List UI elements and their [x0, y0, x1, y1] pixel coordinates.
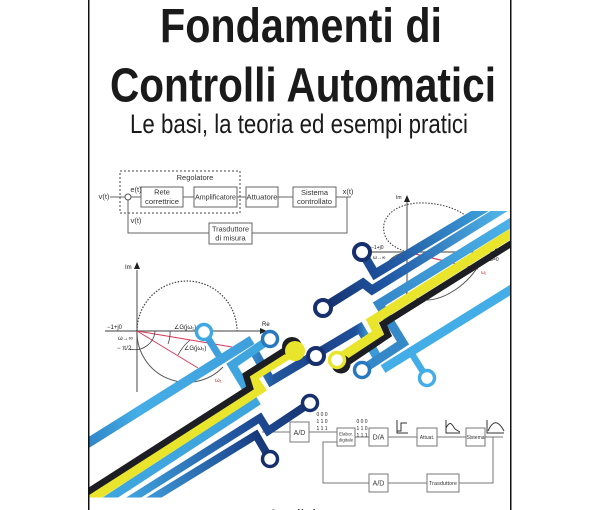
polar plot: upper right: [370, 195, 502, 300]
circuit traces: [90, 211, 510, 498]
block diagram: digital control loop: Attuat.: [420, 435, 434, 441]
block diagram: analog control loop: Trasduttore: [212, 224, 249, 234]
block diagram: analog control loop: Sistema: [301, 188, 329, 197]
trace: black: [80, 349, 287, 497]
block diagram: digital control loop: Trasduttore: [429, 481, 457, 487]
polar plot: lower left: Re: [262, 322, 270, 328]
polar plot: upper right: ω=0: [489, 257, 499, 263]
block diagram: digital control loop: A/D: [294, 430, 305, 437]
block diagram: digital control loop: 0 0 0: [316, 412, 328, 418]
polar plot: lower left: −1+j0: [107, 325, 123, 331]
block diagram: digital control loop: 0 0 0: [356, 419, 368, 425]
block diagram: digital control loop: 1 1 1: [356, 433, 368, 439]
trace: right black: [345, 238, 520, 364]
polar plot: upper right: −1+j0: [371, 245, 384, 251]
block diagram: analog control loop: v(t): [131, 216, 142, 225]
polar plot: lower left: ω₁: [215, 378, 222, 384]
title: Controlli Automatici: [110, 60, 496, 112]
block diagram: analog control loop: controllato: [297, 197, 332, 206]
block diagram: analog control loop: di misura: [215, 234, 247, 242]
block diagram: digital control loop: A/D: [373, 480, 384, 488]
block diagram: digital control loop: 1 1 1: [316, 426, 328, 432]
polar plot: upper right: ω→∞: [373, 255, 386, 261]
block diagram: digital control loop: D/A: [373, 434, 385, 442]
polar plot: upper right: Im: [396, 195, 402, 201]
block diagram: analog control loop: Regolatore: [177, 173, 213, 182]
polar plot: lower left: Im: [125, 265, 132, 271]
title: [110, 0, 496, 112]
trace: blue to right ring: [105, 339, 270, 501]
subtitle: Le basi, la teoria ed esempi pratici: [130, 109, 468, 139]
trace: lower stem: [410, 354, 426, 372]
polar plot: lower left: − π/2: [117, 346, 132, 352]
trace: light blue upper left: [80, 340, 252, 448]
trace: yellow: [90, 354, 290, 498]
block diagram: analog control loop: [99, 171, 354, 244]
trace: mid blue with ring: [125, 403, 310, 503]
block diagram: analog control loop: v(t): [99, 192, 110, 201]
block diagram: digital control loop: digitale: [339, 438, 354, 442]
trace: dark blue centre link: [255, 328, 380, 381]
title: Fondamenti di: [160, 0, 442, 53]
trace: light blue stem: [206, 338, 222, 358]
connector rings: [196, 244, 434, 466]
trace: right light blue: [362, 217, 520, 370]
block diagram: digital control loop: 1 1 0: [356, 426, 368, 432]
polar plot: upper right: ω₁: [481, 270, 487, 276]
block diagram: analog control loop: Attuatore: [246, 192, 278, 202]
block diagram: analog control loop: x(t): [343, 187, 354, 196]
polar plot: lower left: [105, 262, 270, 392]
block diagram: analog control loop: correttrice: [145, 197, 179, 206]
block diagram: analog control loop: e(t): [130, 185, 142, 194]
trace: right yellow: [337, 228, 520, 360]
block diagram: digital control loop: Sistema: [466, 435, 485, 441]
block diagram: digital control loop: Elabor.: [339, 432, 353, 436]
polar plot: lower left: ω→∞: [118, 336, 133, 342]
trace: upper right dark to mid blue: [362, 205, 490, 274]
block diagram: digital control loop: [262, 412, 504, 492]
trace: right lower light blue: [383, 284, 520, 369]
block diagram: analog control loop: Rete: [154, 188, 170, 196]
polar plot: lower left: ∠G(jω₁): [174, 324, 196, 331]
block diagram: digital control loop: 1 1 0: [316, 419, 328, 425]
block diagram: analog control loop: Amplificatore: [195, 192, 236, 202]
trace: lower blue with ring: [145, 435, 270, 503]
book cover: [88, 0, 512, 510]
trace: upper right long blue: [328, 211, 508, 308]
polar plot: lower left: ∠G(jω₂): [184, 345, 206, 352]
